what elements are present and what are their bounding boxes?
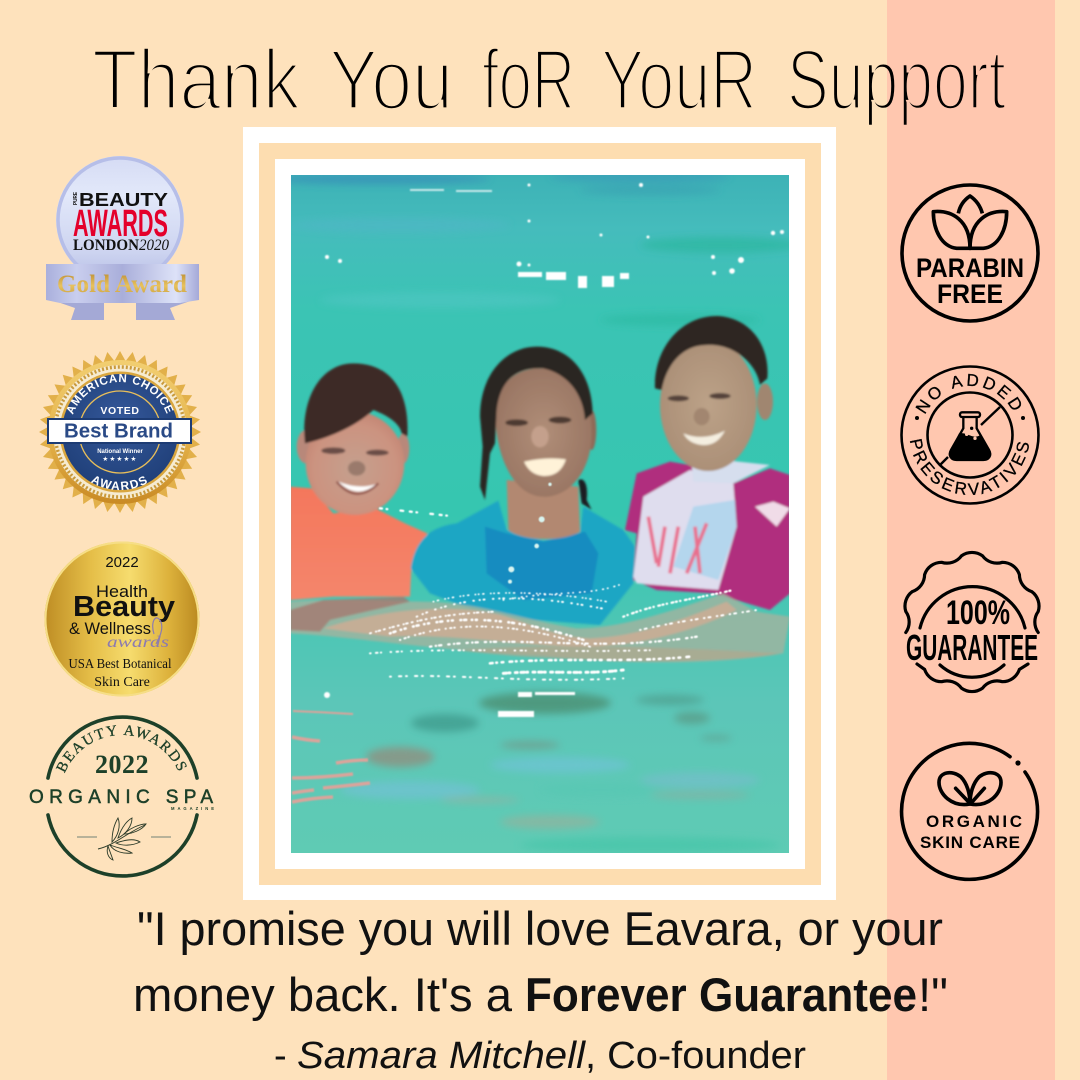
- quote: [133, 902, 948, 1021]
- attribution: , Co-founder: [585, 1035, 806, 1077]
- sparkles on water: [324, 183, 784, 717]
- badge: Health Beauty & Wellness Awards: [44, 542, 200, 696]
- badge: American Choice Best Brand: [39, 351, 201, 513]
- badge: Organic Spa Beauty Awards 2022: 2022: [95, 750, 149, 779]
- badge: Pure Beauty Awards London 2020 Gold Award: PURE: [73, 192, 79, 205]
- photo: family in the sea: [270, 172, 800, 853]
- badge: Health Beauty & Wellness Awards: & Wellness: [69, 619, 151, 638]
- badge: Pure Beauty Awards London 2020 Gold Award: BEAUTY: [79, 189, 169, 210]
- badge: Health Beauty & Wellness Awards: Beauty: [73, 591, 175, 623]
- badge: Organic Spa Beauty Awards 2022: [29, 715, 214, 878]
- right child: [625, 316, 790, 610]
- badge: Organic Spa Beauty Awards 2022: MAGAZINE: [171, 806, 214, 811]
- reddish reflections: [292, 711, 370, 802]
- water droplets and splashes: [370, 508, 757, 680]
- title: foR: [482, 33, 575, 128]
- badge: American Choice Best Brand: AWARDS: [90, 476, 147, 490]
- title: Thank: [92, 33, 300, 128]
- title: You: [329, 33, 453, 128]
- woman: [411, 347, 635, 625]
- quote: Forever Guarantee: [525, 968, 917, 1021]
- badge: Pure Beauty Awards London 2020 Gold Award: AWARDS: [73, 203, 168, 245]
- badge: Health Beauty & Wellness Awards: 2022: [105, 554, 139, 571]
- badge: Health Beauty & Wellness Awards: awards: [107, 634, 169, 651]
- icon: 100% guarantee: 100%: [946, 594, 1010, 632]
- badge: American Choice Best Brand: Best Brand: [64, 420, 173, 442]
- title: YouR: [601, 33, 757, 128]
- photo frame: [243, 127, 836, 900]
- badge: American Choice Best Brand: National Winner: [97, 449, 143, 455]
- leaf sprig: [98, 818, 146, 860]
- icon: paraben free: FREE: [937, 279, 1003, 309]
- arms and waterline: [290, 593, 790, 662]
- badge: Health Beauty & Wellness Awards: Health: [96, 582, 148, 601]
- badge: American Choice Best Brand: ★★★★★: [102, 455, 138, 463]
- badge: American Choice Best Brand: VOTED: [100, 405, 140, 417]
- badge: Health Beauty & Wellness Awards: Skin Care: [94, 675, 150, 690]
- icon: organic skin care: SKIN CARE: [920, 833, 1020, 852]
- icon: organic skin care: [902, 743, 1038, 879]
- icon: organic skin care: ORGANIC: [926, 812, 1022, 831]
- icon: no added preservatives: [900, 365, 1040, 505]
- title: Support: [787, 33, 1006, 128]
- quote: !": [918, 968, 948, 1021]
- left child: [290, 363, 427, 600]
- icon: 100% guarantee: [905, 552, 1039, 692]
- right accent strip: [887, 0, 1055, 1080]
- icon: no added preservatives: PRESERVATIVES: [910, 438, 1029, 495]
- attribution: [274, 1035, 806, 1077]
- quote: money back. It's a: [133, 968, 513, 1021]
- water ripples: [270, 172, 800, 853]
- title: [92, 33, 1006, 128]
- badge: Health Beauty & Wellness Awards: USA Best Botanical: [68, 657, 172, 672]
- icon: paraben free: [902, 185, 1038, 321]
- badge: Pure Beauty Awards London 2020 Gold Award: Gold Award: [57, 271, 187, 298]
- badge: Pure Beauty Awards London 2020 Gold Award: LONDON2020: [73, 237, 169, 254]
- attribution: -: [274, 1035, 287, 1077]
- badge: American Choice Best Brand: AMERICAN CHOICE: [67, 374, 174, 415]
- icon: no added preservatives: NO ADDED: [915, 374, 1022, 414]
- quote: "I promise you will love Eavara, or your: [137, 902, 943, 955]
- attribution: Samara Mitchell: [297, 1035, 587, 1077]
- badge: Organic Spa Beauty Awards 2022: ORGANIC SPA: [29, 787, 213, 808]
- starburst teeth: [27, 339, 213, 525]
- badge: Pure Beauty Awards London 2020 Gold Award: [46, 156, 199, 320]
- icon: paraben free: PARABIN: [916, 253, 1024, 283]
- badge: Organic Spa Beauty Awards 2022: BEAUTY AWARDS: [56, 725, 187, 774]
